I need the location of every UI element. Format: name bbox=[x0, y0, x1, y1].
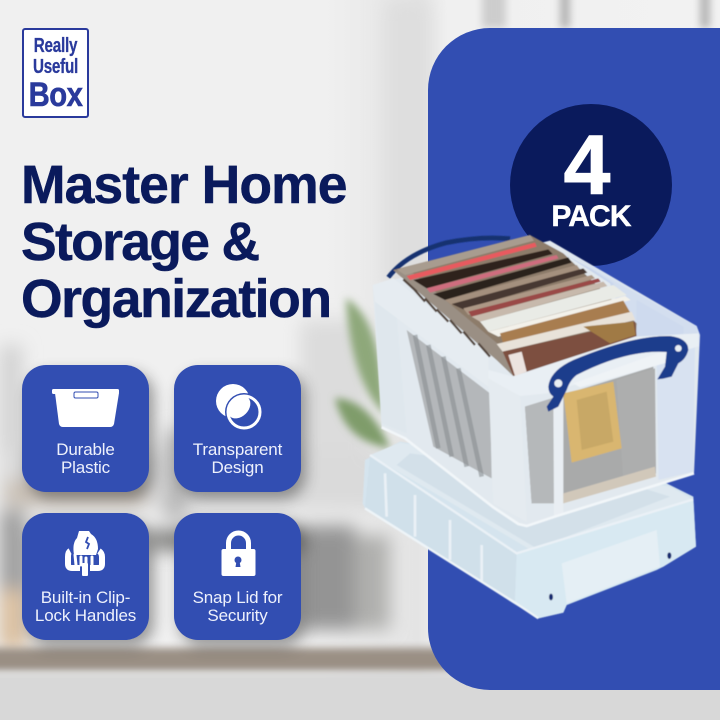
badge: 4 pack bbox=[510, 104, 672, 266]
panel: transparent design bbox=[174, 365, 301, 492]
title bbox=[21, 156, 347, 329]
title: Master Home bbox=[21, 156, 347, 215]
label bbox=[193, 440, 282, 477]
box body bbox=[373, 241, 700, 526]
CD stack bbox=[393, 235, 637, 376]
label: Built-in Clip- bbox=[41, 588, 130, 607]
front handle bbox=[547, 336, 688, 412]
icon: hand on handle bbox=[65, 531, 105, 576]
logo: Really Useful Box: Box bbox=[29, 76, 82, 114]
label: Transparent bbox=[193, 440, 282, 459]
icon: padlock bbox=[222, 530, 256, 576]
label: Lock Handles bbox=[35, 606, 136, 625]
badge: 4 pack: PACK bbox=[551, 200, 631, 233]
label bbox=[193, 588, 282, 625]
label bbox=[56, 440, 115, 477]
panel: blue product backdrop bbox=[428, 28, 720, 690]
logo: Really Useful Box: Really bbox=[34, 35, 77, 57]
icon: overlapping circles bbox=[216, 384, 262, 430]
logo: Really Useful Box: Useful bbox=[33, 56, 78, 78]
panel: durable plastic bbox=[22, 365, 149, 492]
lid bbox=[363, 442, 696, 618]
badge: 4 pack: 4 bbox=[564, 118, 610, 212]
label: Plastic bbox=[61, 458, 110, 477]
back handle bbox=[388, 238, 510, 277]
logo: Really Useful Box bbox=[22, 28, 89, 118]
panel: snap lid bbox=[174, 513, 301, 640]
label: Snap Lid for bbox=[193, 588, 282, 607]
label bbox=[35, 588, 136, 625]
label: Design bbox=[211, 458, 264, 477]
label: Security bbox=[207, 606, 268, 625]
rim bbox=[373, 250, 700, 396]
title: Storage & bbox=[21, 213, 258, 272]
panel: clip-lock handles bbox=[22, 513, 149, 640]
title: Organization bbox=[21, 270, 331, 329]
icon: storage tub bbox=[52, 389, 119, 427]
label: Durable bbox=[56, 440, 115, 459]
